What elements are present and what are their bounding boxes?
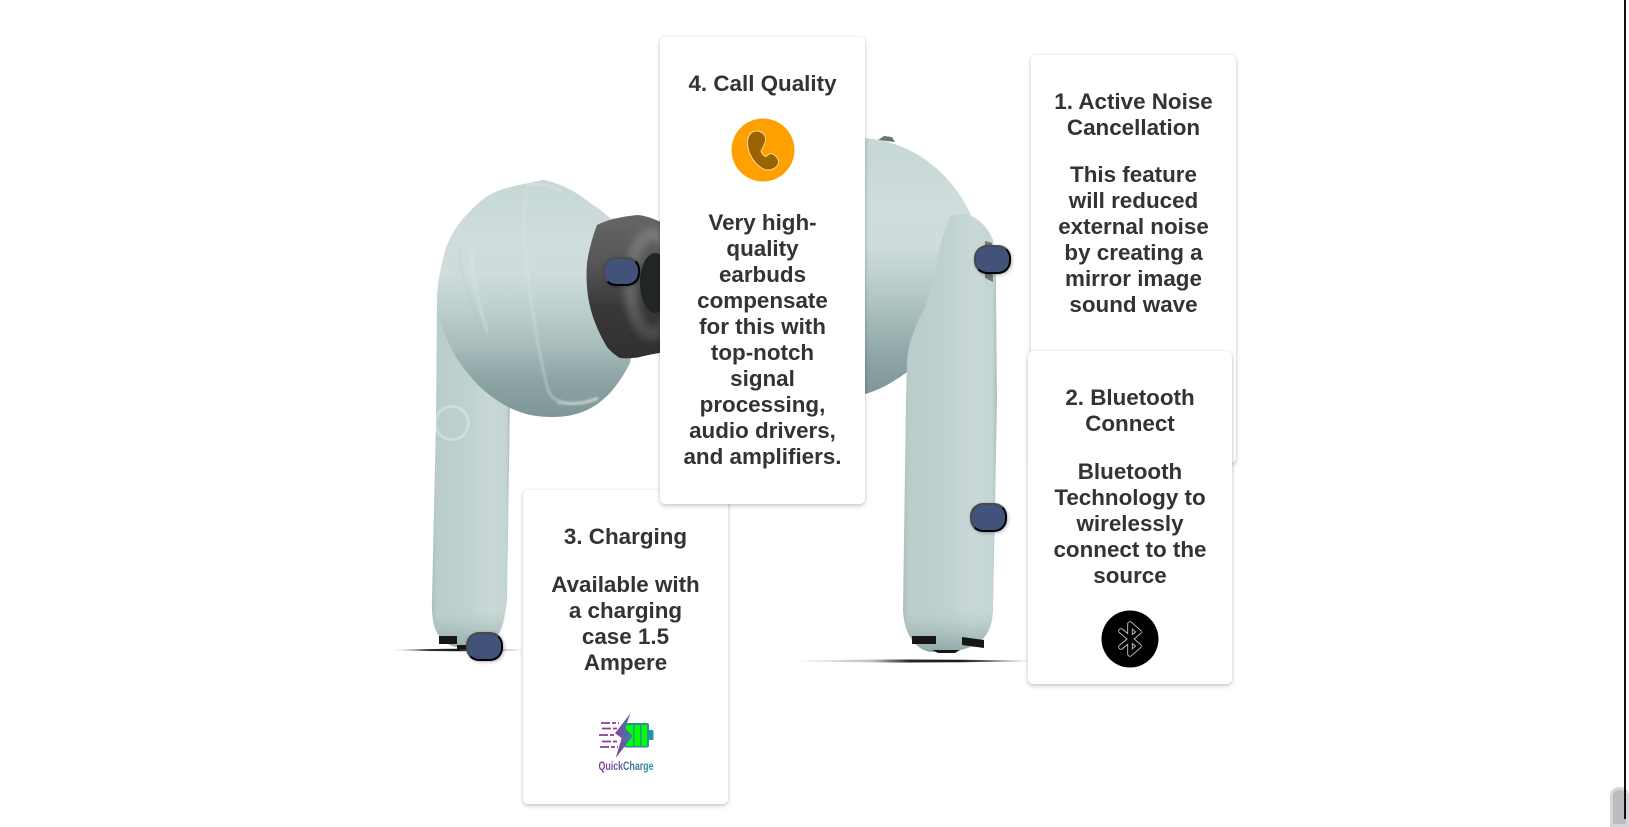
text: noise cancellation description: will reduced [1069, 188, 1198, 213]
text: charging description: a charging [569, 598, 682, 623]
heading: active noise cancellation: 1. Active Noise [1054, 89, 1213, 114]
icon: quick charge logo [598, 713, 654, 773]
text: call quality description: for this with [699, 314, 826, 339]
text: charging description: Ampere [584, 650, 667, 675]
text: call quality description: signal [730, 366, 795, 391]
scrollbar [1610, 0, 1629, 827]
heading: bluetooth connect: 2. Bluetooth [1065, 385, 1195, 410]
hotspot: right stem middle [970, 503, 1007, 532]
right ground shadow [785, 660, 1035, 662]
text: bluetooth description: wirelessly [1076, 511, 1184, 536]
heading: charging: 3. Charging [564, 524, 687, 549]
panel: bluetooth connect [1028, 351, 1232, 684]
text: charging description [551, 572, 700, 675]
left head [437, 180, 640, 417]
left stem ring [436, 406, 468, 440]
text: bluetooth description [1053, 459, 1206, 588]
left ground shadow [390, 649, 525, 651]
panel: charging [523, 490, 728, 804]
text: call quality description: top-notch [711, 340, 814, 365]
side slit [985, 241, 993, 282]
text: noise cancellation description: This feature [1070, 162, 1197, 187]
scrollbar thumb [1610, 787, 1629, 827]
text: noise cancellation description [1058, 162, 1209, 317]
text: noise cancellation description: sound wave [1069, 292, 1198, 317]
text: noise cancellation description: by creating a [1064, 240, 1203, 265]
heading: bluetooth connect [1065, 385, 1195, 436]
heading: active noise cancellation [1054, 89, 1213, 140]
panel: call quality [660, 37, 865, 504]
text: call quality description: audio drivers, [689, 418, 836, 443]
window edge line [1624, 0, 1626, 819]
text: bluetooth description: source [1093, 563, 1167, 588]
ear tip opening [640, 253, 660, 313]
text: call quality description: Very high- [708, 210, 817, 235]
hotspot: right stem top [974, 245, 1011, 274]
left head seam [524, 186, 598, 403]
text: call quality description: compensate [697, 288, 828, 313]
text: call quality description: earbuds [719, 262, 806, 287]
text: call quality description [683, 210, 842, 469]
ear tip [586, 215, 660, 358]
illustration: earbuds [396, 136, 1028, 662]
text: noise cancellation description: mirror image [1065, 266, 1202, 291]
text: call quality description: quality [726, 236, 799, 261]
left stem contacts [439, 636, 467, 649]
right earbud [785, 136, 1035, 662]
icon: phone [732, 118, 794, 182]
heading: call quality: 4. Call Quality [688, 70, 837, 96]
text: call quality description: and amplifiers. [683, 444, 842, 469]
panel: active noise cancellation [1031, 55, 1236, 463]
text: bluetooth description: Bluetooth [1078, 459, 1182, 484]
heading: bluetooth connect: Connect [1085, 411, 1175, 436]
hotspot: ear tip [603, 257, 640, 286]
text: charging description: Available with [551, 572, 700, 597]
text: noise cancellation description: external noise [1058, 214, 1209, 239]
text: call quality description: processing, [700, 392, 825, 417]
text: bluetooth description: connect to the [1053, 537, 1206, 562]
icon: bluetooth [1102, 610, 1158, 668]
hotspot: left stem bottom [466, 632, 503, 661]
text: bluetooth description: Technology to [1054, 485, 1206, 510]
left earbud [390, 180, 680, 652]
heading: active noise cancellation: Cancellation [1067, 115, 1200, 140]
right head [850, 138, 975, 397]
left stem [432, 300, 510, 652]
text: charging description: case 1.5 [582, 624, 669, 649]
top nub [878, 136, 895, 142]
right stem contacts [912, 636, 984, 653]
right stem [903, 214, 997, 652]
